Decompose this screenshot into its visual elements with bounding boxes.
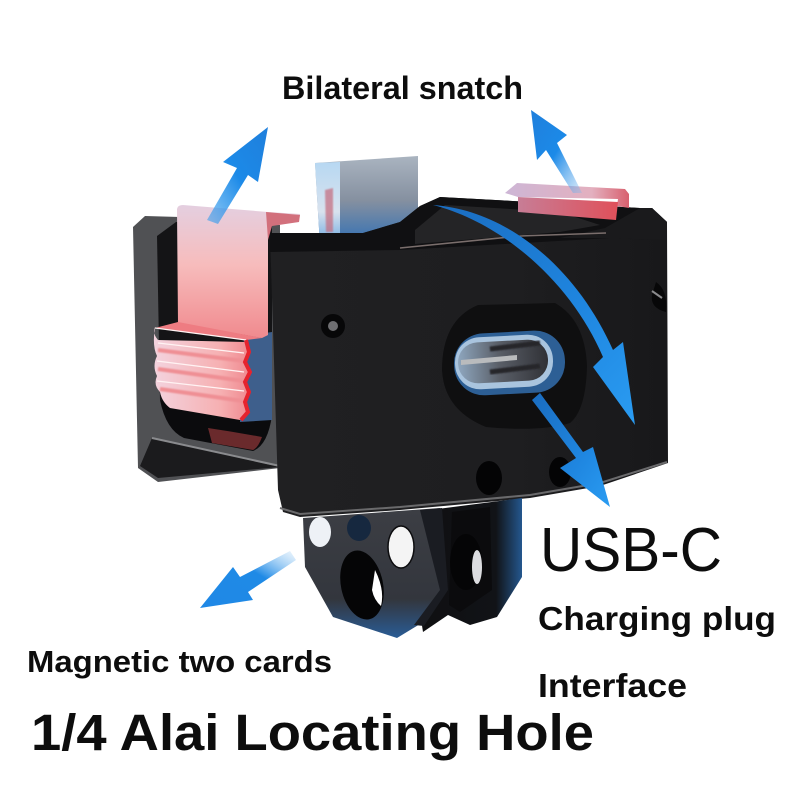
- lower mount fingers: [303, 498, 522, 638]
- arrow: usb-c lower right: [532, 393, 610, 507]
- heading: bilateral snatch: Bilateral snatch: [282, 70, 523, 106]
- plate lower face: [140, 438, 280, 478]
- arrow: upper left: [207, 127, 268, 224]
- main black body: [270, 197, 668, 517]
- back plate: [133, 216, 280, 482]
- blue recess right of grip: [240, 332, 272, 422]
- screws: [321, 282, 666, 495]
- recess under grip: [160, 400, 272, 451]
- label: USB-C: USB-C: [540, 516, 722, 585]
- top usb plug: [315, 156, 418, 245]
- label: interface: Interface: [538, 667, 687, 704]
- arrow: lower left: [200, 551, 296, 608]
- label: magnetic two cards: Magnetic two cards: [27, 644, 332, 679]
- arrow: upper right: [531, 110, 582, 193]
- left pink card clip: [177, 205, 300, 338]
- label: charging plug: Charging plug: [538, 600, 776, 637]
- arrow: curved top to right: [433, 205, 635, 425]
- title: locating hole: 1/4 Alai Locating Hole: [31, 704, 594, 761]
- ridged grip: [154, 322, 262, 420]
- top face of body: [270, 197, 667, 252]
- top right pink tab: [505, 183, 629, 220]
- usb-c recess: [442, 303, 587, 429]
- right finger: [418, 498, 522, 632]
- left finger: [303, 508, 446, 638]
- bottom edge: [280, 462, 667, 514]
